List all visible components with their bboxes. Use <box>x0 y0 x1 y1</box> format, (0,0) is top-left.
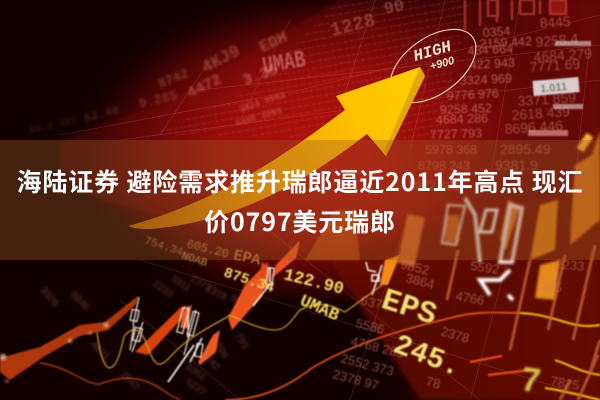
ghost data labels upper left: 4KJ9 <box>199 42 244 78</box>
orange bars lower right <box>447 245 600 400</box>
numeric table lower right: 2552 373 <box>339 350 395 379</box>
numeric table centre right: 9258 452 <box>440 101 492 117</box>
headline: 海陆证券 避险需求推升瑞郎逼近2011年高点 现汇 <box>17 163 583 199</box>
large blurred yellow digits: 7 <box>519 360 543 400</box>
yellow data labels: NOAB <box>180 250 209 270</box>
numeric table lower right: 2378 97 <box>331 366 381 393</box>
numeric table lower right: 285 <box>540 278 563 295</box>
rising yellow arrow <box>128 67 425 229</box>
numeric table lower right: 78 <box>424 373 442 392</box>
numeric table centre right: 0354 <box>482 24 511 40</box>
yellow data labels: 754.34 <box>143 235 185 259</box>
white highlighted box <box>528 41 591 136</box>
translucent title banner <box>0 140 600 260</box>
numeric table lower right: 4766 <box>454 288 486 308</box>
numeric table lower left: 9362 <box>183 361 208 383</box>
yellow data labels: 245. <box>389 329 466 384</box>
numeric table far right: 9381.9 <box>495 157 538 173</box>
numeric table lower left: 3311 <box>168 273 193 294</box>
numeric table far right: 8445 <box>539 13 571 31</box>
numeric table centre right: 434 664 <box>467 42 513 58</box>
numeric table lower left: 2371 <box>188 273 214 294</box>
ghost data labels upper left: 3824 9952 <box>238 90 287 115</box>
numeric table far right: 4684 279 <box>533 45 593 65</box>
small chart markers at left <box>0 322 109 383</box>
HIGH +900 badge: +900 <box>429 55 457 73</box>
numeric table centre right: 9776 976 <box>446 86 499 103</box>
ghost data labels top centre: UMAB <box>260 47 308 81</box>
yellow data labels: UMAB <box>297 292 342 326</box>
orange average curve <box>40 312 600 400</box>
numeric table far right: 8696 446 <box>504 117 564 137</box>
numeric table lower right: 9852 <box>399 256 431 278</box>
numeric table lower left: 793 <box>232 331 250 351</box>
headline: 价0797美元瑞郎 <box>204 203 396 239</box>
ghost data labels upper left: 8742 <box>156 66 191 92</box>
numeric table far right: 2895.49 <box>500 141 551 157</box>
white highlighted box: 1.011 <box>540 81 568 95</box>
numeric table far right: 9258.4 <box>535 30 579 50</box>
numeric table centre right: 5978 368 <box>425 143 477 157</box>
numeric table centre right: 3972 881 <box>408 179 460 193</box>
yellow data labels: EPA <box>232 247 262 270</box>
numeric table lower right: 2233 <box>555 256 585 274</box>
numeric table lower right: 6374 <box>359 292 391 314</box>
numeric table lower left: 2847 <box>118 369 142 393</box>
numeric table lower right: 2378 <box>439 323 471 346</box>
numeric table far right: 2618 439 <box>511 103 571 123</box>
yellow moving average line <box>97 285 382 368</box>
numeric table lower left: 2233 <box>150 278 175 300</box>
ghost data labels top centre <box>260 0 406 81</box>
numeric table centre right: 2159 442 <box>479 34 532 51</box>
rising orange candlestick trend <box>0 210 400 380</box>
numeric table far right: 7771 69 <box>529 55 581 75</box>
numeric table centre right: 422 943 <box>469 56 515 72</box>
numeric table centre right <box>408 24 532 193</box>
candlesticks right of banner <box>397 130 600 300</box>
numeric table lower right: 3864 <box>404 270 436 292</box>
HIGH +900 badge: HIGH <box>411 38 454 66</box>
fine data texture <box>150 0 470 140</box>
ghost data labels upper left: 9.285 <box>137 88 179 112</box>
numeric table centre right: 3324 969 <box>459 71 512 88</box>
numeric table lower right <box>331 256 585 393</box>
headline <box>17 163 583 239</box>
numeric table centre right: 7727 793 <box>430 126 482 142</box>
ghost data labels upper left: 4472 <box>185 71 225 102</box>
ghost data labels upper left: 52.48 <box>83 104 121 126</box>
numeric table centre right: 8798 243 <box>418 159 470 173</box>
numeric table lower right: 7825 <box>549 373 581 393</box>
numeric table lower left: 4621 <box>88 339 112 363</box>
ghost data labels upper left: 3.35 <box>241 61 281 90</box>
numeric table far right <box>495 13 593 173</box>
HIGH +900 badge <box>377 15 489 117</box>
yellow data labels <box>143 235 466 384</box>
numeric table lower right: 5586 <box>354 315 386 337</box>
ghost data labels upper left <box>29 28 290 137</box>
numeric table centre right: 4684 286 <box>436 111 488 127</box>
numeric table lower left: 3928 <box>38 285 61 309</box>
numeric table lower left: 8846 <box>68 289 92 313</box>
yellow data labels: EPS <box>377 283 441 334</box>
candlestick strip top <box>465 0 566 30</box>
numeric table lower right: 5592 <box>470 258 500 277</box>
numeric table lower left: 596 <box>212 341 230 361</box>
ghost data labels upper left: 88.3 462 <box>29 116 78 137</box>
numeric table lower left <box>38 273 254 398</box>
yellow data labels: 605.20 <box>185 237 230 261</box>
yellow data labels: 875.34 <box>221 266 276 297</box>
numeric table lower right: 4768 285 <box>349 333 406 361</box>
ghost data labels top centre: 1228 <box>328 9 378 42</box>
ghost data labels upper left: EDH <box>257 28 290 57</box>
ghost data labels upper left: 4486 2281 <box>234 106 284 129</box>
numeric table lower left: 9124 <box>229 293 254 313</box>
white candlesticks <box>130 262 382 382</box>
yellow data labels: 122.90 <box>282 266 346 300</box>
numeric table lower left: 5237 <box>183 376 208 398</box>
numeric table far right: 3371 859 <box>517 89 577 109</box>
numeric table lower left: 2318 <box>204 283 229 303</box>
numeric table lower left: 642 <box>203 353 222 373</box>
